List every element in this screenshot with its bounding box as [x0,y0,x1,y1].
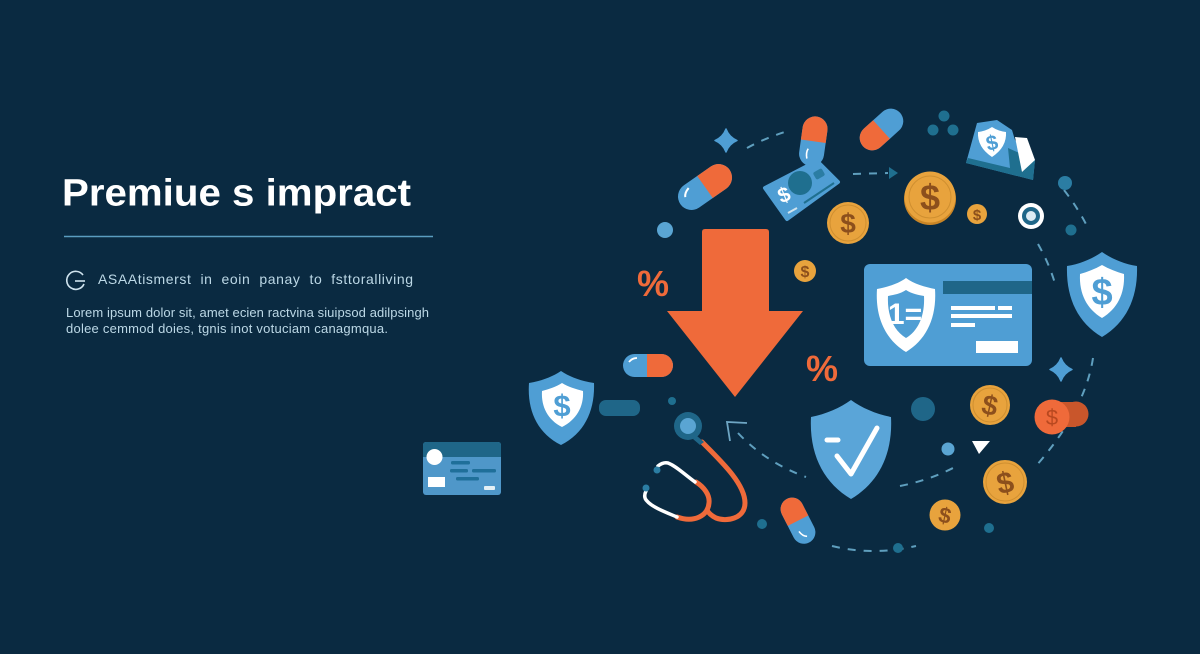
shield card top right [966,120,1035,180]
pill horizontal [623,354,673,377]
subtitle: ASAAtismerst in eoin panay to fsttoralliving [98,271,413,287]
coin [827,202,869,244]
dots [657,110,1076,553]
coin orange stack [1034,400,1088,434]
card shield [877,278,935,352]
coin lower large [983,460,1027,504]
shield check [811,400,891,499]
percent right: % [806,348,838,389]
percent left: % [637,263,669,304]
shield right [1067,252,1137,337]
insurance card large [864,264,1032,366]
coin orange stack: $ [1046,405,1058,430]
dashed orbit lines [727,131,1093,551]
down arrow [667,229,803,397]
card lines [951,306,1018,353]
subtitle icon [67,271,85,289]
insurance card large: 1= [888,298,922,331]
stethoscope [642,412,745,520]
pill bottom [777,494,819,548]
coin small: $ [801,264,810,281]
pill top right [855,103,908,156]
coin lower large: $ [994,466,1017,501]
body text [66,305,429,336]
coin lower [970,385,1010,425]
small card [423,442,501,495]
shield card top right: $ [984,131,1001,156]
shield left with bar: $ [553,388,571,423]
star top [715,129,737,152]
body text: Lorem ipsum dolor sit, amet ecien ractvina siuipsod adilpsingh [66,305,429,320]
coins [794,172,1088,530]
coin small right: $ [973,207,982,224]
coin bottom [930,500,960,530]
target icon [1018,203,1044,229]
coin large top: $ [920,177,940,218]
tilted credit card: $ [774,182,794,208]
shield right: $ [1091,272,1113,314]
title: Premiue s impract [62,172,411,214]
pill top centre [797,115,829,168]
shield left with bar [529,371,640,445]
star right [1050,358,1072,381]
stethoscope head [674,412,704,445]
tilted credit card [765,161,838,219]
coin large top [904,172,956,225]
coin: $ [840,208,856,239]
coin lower: $ [979,389,1001,422]
coin small right [967,204,987,224]
white triangle [972,441,990,454]
body text: dolee cemmod doies, tgnis inot votuciam canagmqua. [66,321,388,336]
pill left [673,159,737,215]
coin bottom: $ [936,502,953,529]
coin small [794,260,816,282]
